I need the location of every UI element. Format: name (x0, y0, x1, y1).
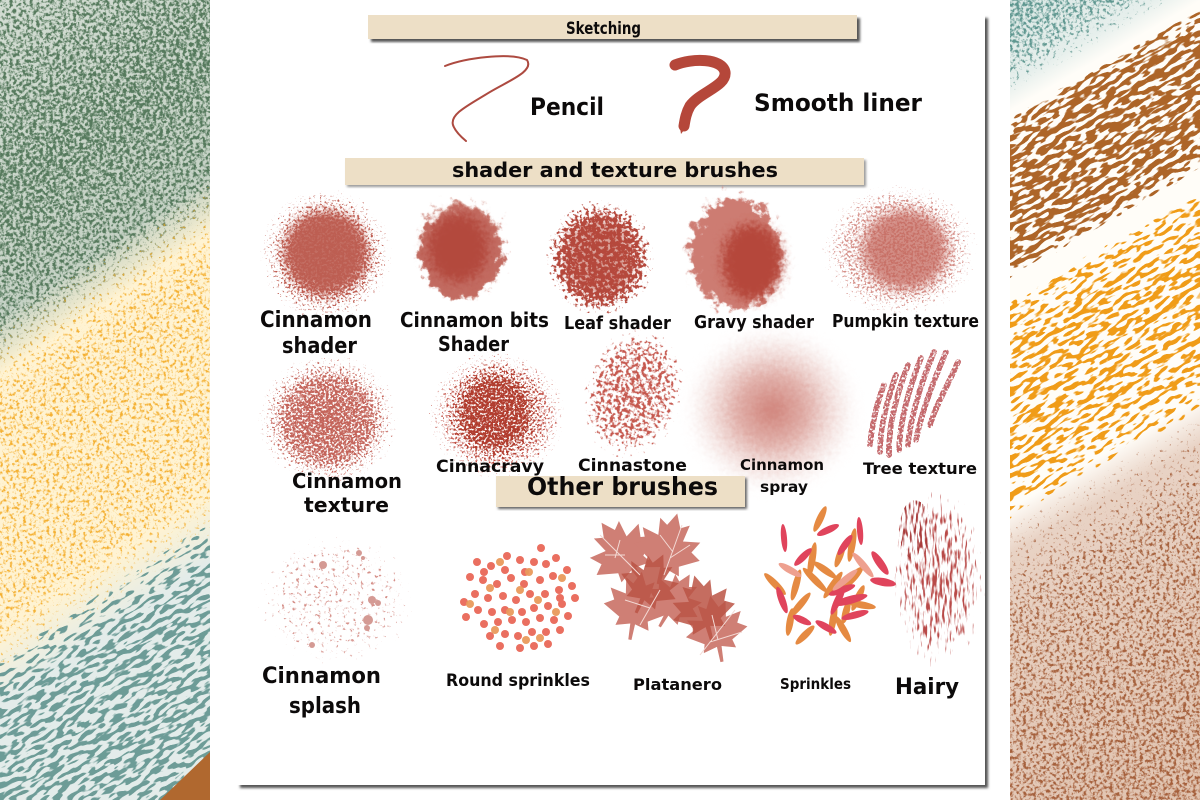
label: Gravy shader: Gravy shader (694, 312, 814, 333)
label: Leaf shader: Leaf shader (564, 313, 671, 334)
label: Platanero: Platanero (633, 675, 722, 694)
brush sample: Pumpkin texture (822, 184, 978, 316)
label: Cinnamon bits Shader: Shader (438, 332, 509, 356)
brush sample: Cinnacravy (429, 351, 565, 479)
label: Cinnacravy: Cinnacravy (436, 457, 544, 477)
banner: Sketching: Sketching (566, 19, 641, 39)
smooth liner stroke sample (675, 60, 725, 134)
banner: shader and texture brushes (345, 158, 866, 187)
label: Cinnamon texture (292, 469, 402, 517)
brush sample: Cinnastone (568, 316, 698, 470)
brush sample: Sprinkles (762, 505, 896, 647)
brush sample: Cinnamon spray (686, 328, 858, 492)
label: Cinnamon bits Shader (400, 308, 549, 356)
label: Cinnastone: Cinnastone (578, 456, 687, 476)
label: Cinnamon shader: Cinnamon (260, 308, 372, 333)
label: Sprinkles: Sprinkles (780, 675, 851, 693)
label: Cinnamon shader: shader (282, 334, 357, 359)
label: Cinnamon splash (262, 664, 381, 719)
label: Smooth liner: Smooth liner (754, 89, 922, 117)
brush sample: Hairy (890, 488, 986, 668)
label: Cinnamon texture: Cinnamon (292, 469, 402, 493)
label: Round sprinkles: Round sprinkles (446, 671, 590, 691)
label: Cinnamon bits Shader: Cinnamon bits (400, 308, 549, 332)
pencil stroke sample (445, 56, 528, 141)
brush sample: Cinnamon texture (258, 354, 398, 486)
label: Cinnamon texture: texture (304, 493, 389, 517)
label: Pencil: Pencil (530, 93, 604, 121)
brush sample: Cinnamon splash (257, 534, 413, 666)
label: Cinnamon splash: splash (289, 694, 361, 719)
banner: Other brushes (496, 472, 747, 509)
brush sample: Round sprinkles (460, 544, 579, 652)
brush sample: Cinnamon bits shader (419, 202, 503, 298)
brush sample: Leaf shader (546, 200, 654, 316)
right decorative texture strip (1010, 0, 1200, 800)
label: Cinnamon spray (740, 456, 824, 496)
label: Cinnamon shader (260, 308, 372, 359)
white brush sheet panel (237, 15, 985, 785)
left decorative texture strip (0, 0, 210, 800)
brush sample: Gravy shader (690, 196, 782, 308)
panel shadow (240, 18, 988, 788)
label: Pumpkin texture: Pumpkin texture (832, 311, 979, 332)
label: Cinnamon splash: Cinnamon (262, 664, 381, 689)
brush sample: Cinnamon shader (260, 189, 392, 321)
label: Cinnamon spray: spray (760, 478, 808, 496)
banner: shader and texture brushes: shader and texture brushes (452, 158, 778, 182)
brush sample: Tree texture (870, 352, 958, 455)
brush sample: Platanero leaves (574, 503, 753, 667)
label: Tree texture: Tree texture (863, 459, 977, 478)
banner: Sketching (368, 15, 860, 42)
banner: Other brushes: Other brushes (527, 472, 718, 501)
label: Hairy: Hairy (895, 675, 959, 700)
label: Cinnamon spray: Cinnamon (740, 456, 824, 474)
